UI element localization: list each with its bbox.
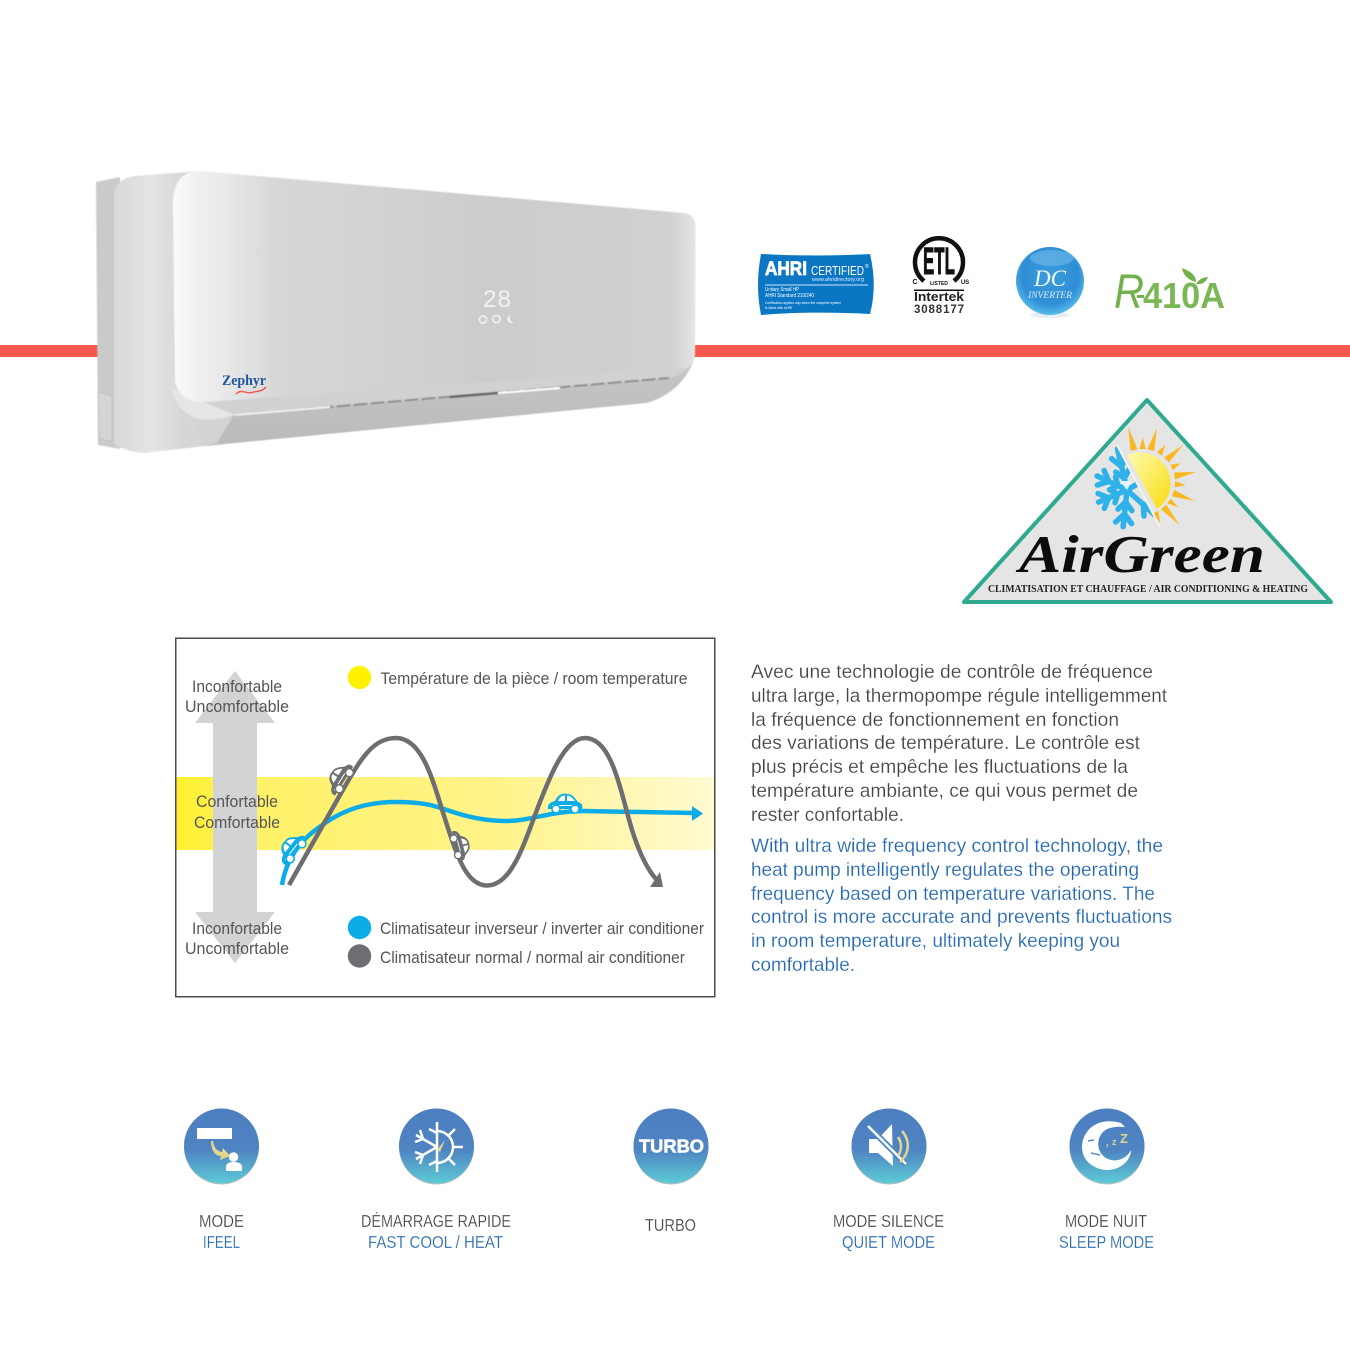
double arrow comfort scale <box>195 671 275 963</box>
AHRI certified badge: Certification applies only when the complete system <box>765 300 842 305</box>
label: fast start: FAST COOL / HEAT <box>368 1232 503 1252</box>
icon: fast cool heat <box>399 1108 474 1184</box>
DC inverter sphere: INVERTER <box>1027 291 1072 301</box>
icon: blue car level <box>548 794 582 813</box>
label: quiet mode <box>833 1211 944 1252</box>
feature: sleep mode <box>1059 1108 1154 1252</box>
legend: normal air conditioner <box>348 944 685 968</box>
scale labels: Uncomfortable <box>185 697 289 716</box>
comfort chart panel <box>176 638 715 997</box>
label: fast start: DÉMARRAGE RAPIDE <box>361 1211 511 1231</box>
French description paragraph: température ambiante, ce qui vous permet de <box>751 780 1138 802</box>
air conditioner indoor unit <box>96 171 696 453</box>
label: mode ifeel: MODE <box>199 1211 244 1231</box>
icon: I Feel <box>184 1108 259 1184</box>
AirGreen triangular logo <box>964 400 1331 602</box>
scale labels: Inconfortable <box>192 919 282 938</box>
label: mode ifeel: IFEEL <box>203 1232 240 1252</box>
feature: turbo <box>634 1108 708 1235</box>
icon: moon with z's: Z <box>1120 1131 1128 1146</box>
English description paragraph: frequency based on temperature variations. The <box>751 883 1155 905</box>
icon: gray car falling <box>448 828 473 862</box>
AHRI certified badge: Unitary Small HP <box>765 287 800 293</box>
R-410A refrigerant logo: 410A <box>1143 275 1225 316</box>
ETL Intertek listed mark: 3088177 <box>914 304 964 316</box>
temperature display <box>479 286 514 323</box>
French description paragraph: rester confortable. <box>751 804 904 826</box>
label: sleep mode <box>1059 1211 1154 1252</box>
English description paragraph: in room temperature, ultimately keeping you <box>751 930 1120 952</box>
gray normal curve <box>289 738 663 887</box>
English description paragraph: comfortable. <box>751 954 855 976</box>
AHRI certified badge: ® <box>865 263 869 270</box>
icon: sun and snowflake <box>1094 426 1197 528</box>
blue inverter curve <box>282 802 703 885</box>
French description paragraph: la fréquence de fonctionnement en fonction <box>751 709 1119 731</box>
scale labels: Confortable <box>196 792 278 811</box>
French description paragraph: ultra large, la thermopompe régule intelligemment <box>751 685 1168 707</box>
legend: inverter air conditioner: Climatisateur inverseur / inverter air conditioner <box>380 919 704 938</box>
Zephyr brand logo: Zephyr <box>222 373 266 389</box>
feature: quiet mode <box>833 1108 944 1252</box>
AHRI certified badge: AHRI Standard 210/240 <box>765 293 814 299</box>
label: fast start <box>361 1211 511 1252</box>
label: quiet mode: QUIET MODE <box>842 1232 935 1252</box>
legend: room temperature <box>348 666 688 689</box>
DC inverter sphere: DC <box>1033 266 1067 291</box>
icon: muted speaker <box>852 1108 926 1184</box>
legend: inverter air conditioner <box>348 916 704 939</box>
ETL Intertek listed mark: ETL <box>923 241 955 283</box>
temperature display: 28 <box>482 286 512 315</box>
ETL Intertek listed mark: US <box>961 280 969 286</box>
label: sleep mode: MODE NUIT <box>1065 1211 1147 1231</box>
AHRI certified badge: CERTIFIED <box>811 263 864 278</box>
English description paragraph: control is more accurate and prevents fluctuations <box>751 906 1172 928</box>
icon: gray car rising <box>322 758 357 798</box>
icon: blue car rising <box>273 829 310 868</box>
French description paragraph: des variations de température. Le contrôle est <box>751 732 1141 754</box>
label: mode ifeel <box>199 1211 244 1252</box>
icon: turbo: TURBO <box>639 1136 704 1156</box>
scale labels: Inconfortable <box>192 677 282 696</box>
scale labels: Uncomfortable <box>185 939 289 958</box>
scale labels: Comfortable <box>194 813 280 832</box>
English description paragraph <box>751 835 1172 976</box>
R-410A refrigerant logo: R <box>1114 266 1144 319</box>
feature: fast cool / heat <box>361 1108 511 1252</box>
French description paragraph <box>751 661 1168 826</box>
ETL Intertek listed mark: C <box>912 279 918 286</box>
legend: room temperature: Température de la pièce / room temperature <box>380 669 688 688</box>
icon: moon with z's: z <box>1106 1143 1109 1149</box>
legend: normal air conditioner: Climatisateur normal / normal air conditioner <box>380 948 685 967</box>
French description paragraph: plus précis et empêche les fluctuations de la <box>751 756 1128 778</box>
French description paragraph: Avec une technologie de contrôle de fréquence <box>751 661 1153 683</box>
red horizontal band <box>0 345 1350 357</box>
label: quiet mode: MODE SILENCE <box>833 1211 944 1231</box>
scale labels <box>185 677 289 958</box>
AHRI certified badge: www.ahridirectory.org <box>812 277 864 283</box>
AirGreen tagline: CLIMATISATION ET CHAUFFAGE / AIR CONDITIONING & HEATING <box>988 584 1308 595</box>
English description paragraph: With ultra wide frequency control technology, the <box>751 835 1163 857</box>
label: turbo: TURBO <box>645 1215 696 1235</box>
comfort band <box>176 777 714 850</box>
icon: moon with z's: z <box>1112 1137 1117 1147</box>
icon: moon with z's <box>1070 1108 1144 1184</box>
feature: I Feel mode <box>184 1108 259 1252</box>
DC inverter sphere <box>1016 247 1084 318</box>
AHRI certified badge <box>758 254 874 315</box>
R-410A refrigerant logo <box>1114 266 1225 319</box>
AHRI certified badge: is listed with AHRI <box>765 305 792 310</box>
AirGreen wordmark: AirGreen <box>1015 526 1265 584</box>
ETL Intertek listed mark <box>912 238 969 316</box>
AHRI certified badge: AHRI <box>765 259 807 280</box>
ETL Intertek listed mark: Intertek <box>914 290 964 304</box>
English description paragraph: heat pump intelligently regulates the operating <box>751 859 1139 881</box>
ETL Intertek listed mark: LISTED <box>930 281 948 287</box>
label: sleep mode: SLEEP MODE <box>1059 1232 1154 1252</box>
